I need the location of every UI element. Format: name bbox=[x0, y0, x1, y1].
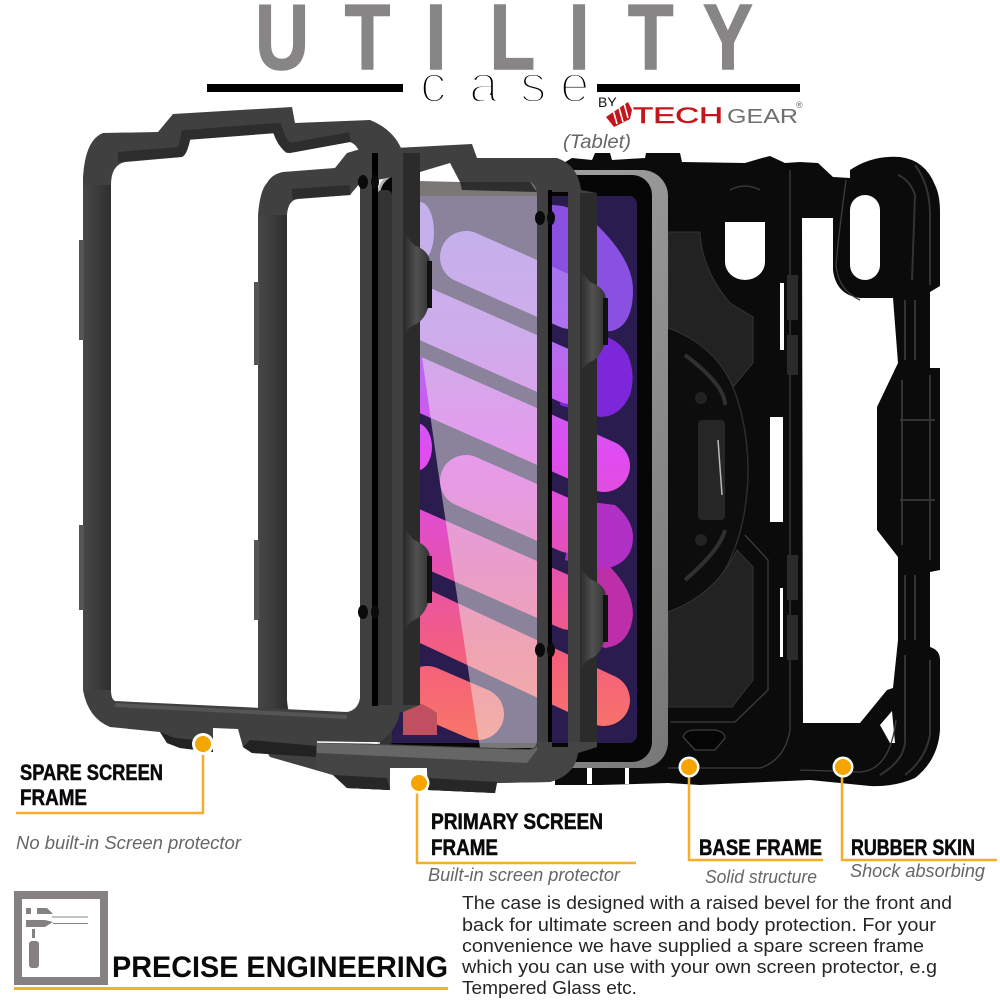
logo: by TechGear bbox=[598, 94, 803, 128]
callout: spare screen frame: SPARE SCREEN bbox=[20, 760, 163, 785]
spare screen frame bbox=[79, 107, 432, 757]
primary frame: bottom edge in front of spare frame bbox=[316, 741, 597, 793]
callout: base frame bbox=[678, 756, 823, 887]
callout: spare screen frame: FRAME bbox=[20, 785, 87, 810]
base frame: upper textured panel bbox=[668, 232, 753, 387]
heading: precise engineering bbox=[14, 951, 448, 990]
logo: by TechGear: BY bbox=[598, 94, 617, 110]
heading: precise engineering: PRECISE ENGINEERING bbox=[112, 951, 448, 984]
primary frame: clips bbox=[254, 270, 608, 670]
tablet bbox=[377, 170, 668, 768]
base frame: wheel and handle bbox=[588, 328, 748, 612]
primary frame: top lip shade bbox=[460, 182, 537, 192]
callout: primary screen frame: FRAME bbox=[431, 835, 498, 860]
glass top glare bbox=[418, 162, 460, 182]
callout: rubber skin bbox=[832, 756, 997, 881]
callout: rubber skin: Shock absorbing bbox=[850, 861, 985, 881]
rubber skin: highlights bbox=[880, 165, 935, 775]
primary screen frame bbox=[254, 144, 608, 793]
rubber skin and base frame bbox=[555, 153, 940, 786]
callout: primary screen frame bbox=[408, 772, 636, 885]
subtitle: case bbox=[207, 55, 800, 114]
callout: rubber skin: RUBBER SKIN bbox=[851, 835, 975, 860]
subtitle: case: case bbox=[420, 55, 589, 114]
base frame: details bbox=[668, 170, 896, 772]
logo: by TechGear: GEAR bbox=[727, 106, 798, 128]
screen protector glass bbox=[418, 180, 537, 748]
callout: spare screen frame: No built-in Screen protector bbox=[16, 833, 242, 853]
text block: description: convenience we have supplied a spare screen frame bbox=[462, 936, 924, 956]
logo: by TechGear: TECH bbox=[633, 103, 723, 128]
text block: description: which you can use with your own screen protector, e.g bbox=[461, 957, 937, 977]
text block: description: back for ultimate screen and body protection. For your bbox=[462, 915, 936, 935]
callout: base frame: BASE FRAME bbox=[699, 835, 822, 860]
base frame: lower textured panel bbox=[668, 550, 753, 707]
callout: spare screen frame bbox=[16, 733, 242, 853]
spare frame: bottom tab shading bbox=[160, 732, 318, 757]
callout: primary screen frame: PRIMARY SCREEN bbox=[431, 809, 603, 834]
tablet label: (Tablet) bbox=[563, 132, 631, 153]
lobes bbox=[552, 205, 633, 331]
spare frame: clips bbox=[79, 233, 432, 631]
icon: calipers bbox=[18, 895, 104, 981]
base frame: side rail bbox=[787, 275, 798, 660]
callout: primary screen frame: Built-in screen protector bbox=[428, 865, 621, 885]
text block: description bbox=[461, 893, 952, 998]
callout: base frame: Solid structure bbox=[705, 867, 817, 887]
text block: description: The case is designed with a raised bevel for the front and bbox=[462, 893, 952, 913]
bands bbox=[400, 257, 604, 714]
logo: by TechGear: ® bbox=[796, 100, 803, 110]
tablet screen wallpaper bbox=[378, 196, 637, 743]
text block: description: Tempered Glass etc. bbox=[462, 978, 637, 998]
base frame: bottom tabs bbox=[587, 768, 629, 784]
